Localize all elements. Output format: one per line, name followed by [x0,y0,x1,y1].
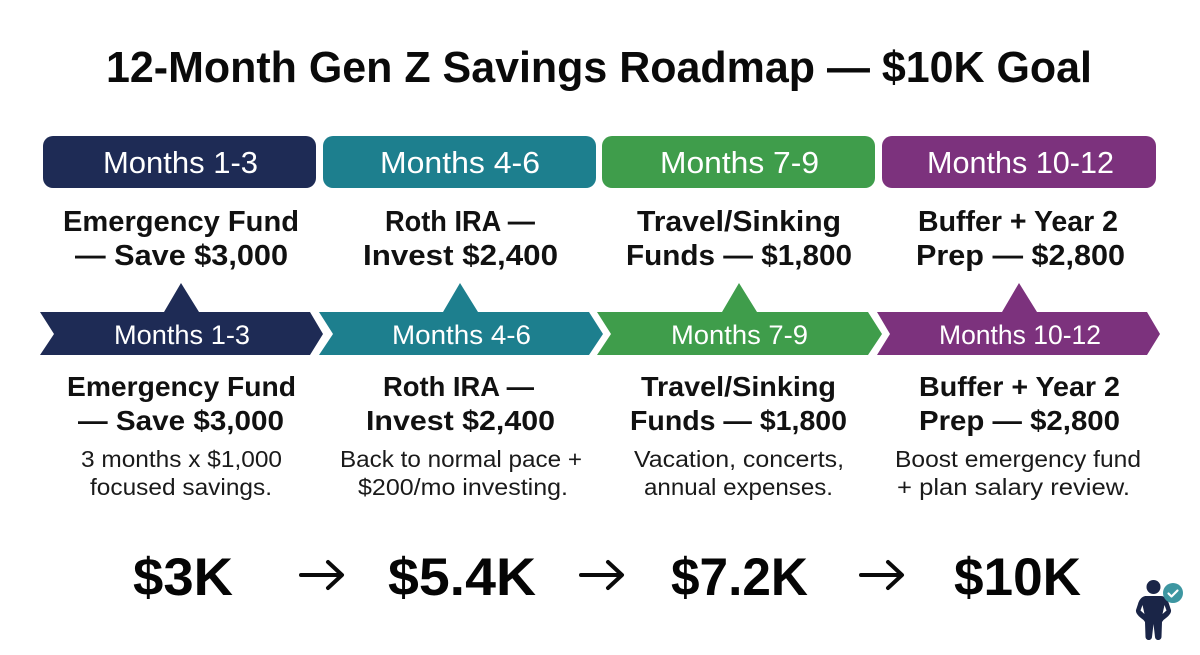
milestone: $7.2K: $7.2K [671,548,808,607]
text block: roth ira detail: $200/mo investing. [358,474,568,500]
heading: roth ira upper: Invest $2,400 [363,240,558,272]
text block: roth ira detail: Invest $2,400 [366,405,555,436]
timeline arrow: months 7-9 [597,283,882,355]
panel: months 1-3 header [43,136,316,188]
text block: emergency fund detail: focused savings. [90,474,272,500]
timeline arrow: months 7-9: Months 7-9 [671,320,808,350]
text block: travel funds detail [630,371,847,500]
heading: roth ira upper: Roth IRA — [385,206,535,238]
heading: buffer upper [916,206,1125,272]
arrow 3 [861,562,902,588]
timeline arrow: months 1-3: Months 1-3 [114,320,250,350]
text block: emergency fund detail [67,371,296,500]
text block: buffer detail: + plan salary review. [897,474,1130,500]
panel: months 7-9 header: Months 7-9 [660,146,819,180]
milestone: $5.4K: $5.4K [388,548,536,607]
heading: travel funds upper: Travel/Sinking [637,206,841,238]
heading: travel funds upper [626,206,852,272]
timeline arrow: months 4-6 [319,283,603,355]
timeline arrow: months 10-12: Months 10-12 [939,320,1101,350]
icon: person with check badge [1136,580,1183,640]
arrow 1 [301,562,342,588]
text block: travel funds detail: annual expenses. [644,474,833,500]
arrow 2 [581,562,622,588]
heading: emergency fund upper: — Save $3,000 [75,240,288,272]
text block: travel funds detail: Vacation, concerts, [634,446,844,472]
text block: emergency fund detail: Emergency Fund [67,371,296,402]
text block: buffer detail [895,371,1141,500]
text block: buffer detail: Boost emergency fund [895,446,1141,472]
text block: roth ira detail: Roth IRA — [383,371,534,402]
panel: months 10-12 header: Months 10-12 [927,146,1114,180]
text block: emergency fund detail: 3 months x $1,000 [81,446,282,472]
panel: months 7-9 header [602,136,875,188]
text block: travel funds detail: Travel/Sinking [641,371,836,402]
text block: buffer detail: Prep — $2,800 [919,405,1120,436]
panel: months 4-6 header: Months 4-6 [380,146,540,180]
text block: emergency fund detail: — Save $3,000 [78,405,284,436]
heading: buffer upper: Buffer + Year 2 [918,206,1118,238]
text block: travel funds detail: Funds — $1,800 [630,405,847,436]
panel: months 1-3 header: Months 1-3 [103,146,258,180]
text block: roth ira detail [340,371,582,500]
panel: months 4-6 header [323,136,596,188]
text block: roth ira detail: Back to normal pace + [340,446,582,472]
milestone: $10K: $10K [954,548,1081,607]
heading: emergency fund upper: Emergency Fund [63,206,299,238]
timeline arrow: months 4-6: Months 4-6 [392,320,531,350]
text block: buffer detail: Buffer + Year 2 [919,371,1120,402]
milestone: $3K: $3K [133,548,233,607]
panel: months 10-12 header [882,136,1156,188]
heading: emergency fund upper [63,206,299,272]
timeline arrow: months 1-3 [40,283,323,355]
heading: buffer upper: Prep — $2,800 [916,240,1125,272]
heading: roth ira upper [363,206,558,272]
title: 12-Month Gen Z Savings Roadmap — $10K Goal [106,44,1092,92]
heading: travel funds upper: Funds — $1,800 [626,240,852,272]
timeline arrow: months 10-12 [877,283,1160,355]
